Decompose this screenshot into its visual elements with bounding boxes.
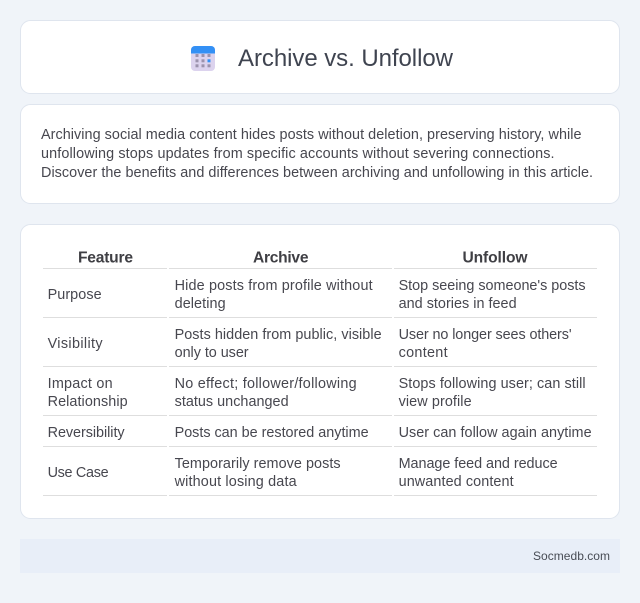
row: use case: without losing data — [174, 474, 297, 490]
footer bar — [20, 539, 620, 573]
icon: calendar — [191, 46, 215, 71]
intro text: unfollowing stops updates from specific accounts without severing connections. — [41, 146, 554, 162]
table header — [43, 250, 597, 269]
row: visibility: only to user — [175, 345, 249, 361]
row: visibility: content — [399, 345, 448, 361]
table header: Unfollow — [462, 250, 528, 266]
row: purpose: Stop seeing someone's posts — [399, 278, 586, 294]
row: visibility: Visibility — [48, 336, 103, 352]
intro panel — [20, 104, 620, 204]
row: use case: Temporarily remove posts — [175, 456, 341, 472]
row: visibility: Posts hidden from public, visible — [175, 327, 382, 343]
row: reversibility: Reversibility — [48, 425, 125, 441]
row: purpose — [43, 278, 597, 318]
intro text: Archiving social media content hides posts without deletion, preserving history, while — [41, 127, 582, 143]
row: impact on relationship: Impact on — [48, 376, 113, 392]
row: impact on relationship: Relationship — [48, 394, 128, 410]
intro text: Discover the benefits and differences between archiving and unfollowing in this article. — [41, 165, 593, 181]
row: purpose: Hide posts from profile without — [175, 278, 373, 294]
row: use case: unwanted content — [399, 474, 514, 490]
row: impact on relationship: view profile — [399, 394, 472, 410]
row: reversibility — [43, 425, 597, 447]
table header: Feature — [78, 250, 133, 266]
row: impact on relationship: No effect; follower/following — [175, 376, 357, 392]
comparison table — [43, 250, 597, 496]
row: purpose: Purpose — [48, 287, 102, 303]
row: reversibility: User can follow again anytime — [399, 425, 592, 441]
table panel — [20, 224, 620, 518]
row: impact on relationship: Stops following user; can still — [399, 376, 586, 392]
table header: Archive — [253, 250, 309, 266]
row: use case: Use Case — [48, 465, 109, 481]
title: Archive vs. Unfollow — [238, 45, 454, 72]
row: use case — [43, 456, 597, 496]
row: impact on relationship: status unchanged — [175, 394, 289, 410]
row: use case: Manage feed and reduce — [399, 456, 558, 472]
row: reversibility: Posts can be restored anytime — [175, 425, 369, 441]
intro text — [41, 127, 593, 181]
row: purpose: and stories in feed — [399, 296, 517, 312]
row: visibility: User no longer sees others' — [399, 327, 572, 343]
row: purpose: deleting — [175, 296, 226, 312]
row: impact on relationship — [43, 376, 597, 416]
header panel — [20, 20, 620, 94]
footer text: Socmedb.com — [533, 549, 610, 563]
row: visibility — [43, 327, 597, 367]
